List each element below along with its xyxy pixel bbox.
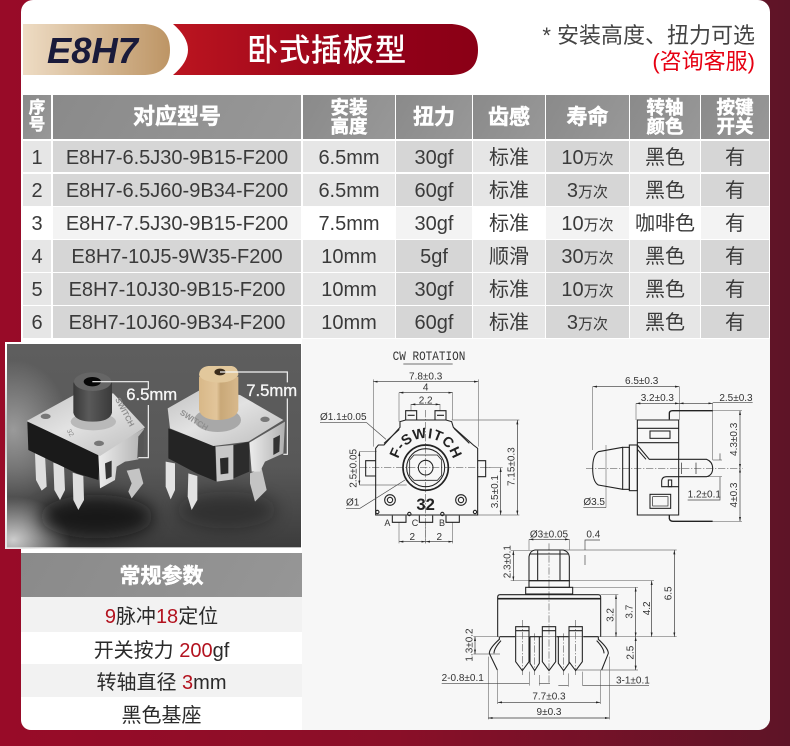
left switch: 6.5mm black shaft	[27, 372, 145, 510]
photo background	[0, 344, 301, 583]
row 2: 60gf	[415, 180, 453, 202]
product photo panel	[5, 342, 301, 549]
row 3: 标准	[489, 213, 529, 235]
drawing: bottom view: Ø3±0.05	[530, 529, 569, 540]
table header: 按键开关	[716, 97, 754, 137]
row 6: 3万次	[567, 312, 608, 334]
row 3	[31, 207, 769, 239]
drawing: bottom view	[442, 529, 677, 719]
table header: 寿命	[566, 106, 608, 128]
drawing: bottom view: 2.3±0.1	[503, 545, 514, 578]
row 1: 黑色	[645, 146, 685, 168]
parameters heading	[21, 553, 302, 597]
row 3: 咖啡色	[635, 213, 695, 235]
drawing: bottom view: 2.5	[625, 645, 636, 660]
drawing: side view: 4.3±0.3	[729, 422, 740, 456]
row 1: 有	[725, 146, 745, 168]
parameter: shaft diameter: 转轴直径 3mm	[96, 672, 226, 694]
drawing: bottom view: 4.2	[642, 601, 653, 615]
note: optional height and torque: * 安装高度、扭力可选	[542, 23, 755, 48]
drawing: side view: 4±0.3	[729, 482, 740, 507]
row 6: 标准	[489, 312, 529, 334]
drawing: front view: 3.5±0.1	[490, 475, 501, 508]
row 4: 顺滑	[489, 246, 529, 268]
row 4: E8H7-10J5-9W35-F200	[71, 246, 283, 268]
row 5: 30gf	[415, 279, 453, 301]
right switch: 7.5mm coffee shaft	[166, 366, 285, 510]
row 4: 10mm	[321, 246, 377, 268]
row 6	[23, 306, 769, 338]
row 5: 有	[725, 279, 745, 301]
row 6: E8H7-10J60-9B34-F200	[69, 312, 285, 334]
parameter: pulses and detents: 9脉冲18定位	[105, 606, 218, 628]
drawing: bottom view: 1.3±0.2	[465, 628, 476, 662]
callout: 6.5mm height: 6.5mm	[126, 385, 177, 404]
row 5: 5	[31, 279, 43, 301]
row 5: 10万次	[561, 279, 614, 301]
row 3: 有	[725, 213, 745, 235]
drawing: front view: 7.15±0.3	[506, 447, 517, 486]
row 2	[23, 174, 769, 206]
table header: 对应型号	[133, 104, 221, 129]
drawing: side view: 6.5±0.3	[625, 376, 659, 387]
drawing: front view: 2.5±0.05	[348, 448, 359, 488]
row 3: 3	[31, 213, 43, 235]
parameter: switch force: 开关按力 200gf	[94, 640, 229, 662]
drawing: bottom view: 3.2	[605, 608, 616, 622]
drawing: front view	[320, 350, 520, 544]
parameters heading: 常规参数	[120, 565, 204, 588]
row 2: 有	[725, 180, 745, 202]
drawing: bottom view: 6.5	[664, 586, 675, 600]
label: CW rotation: CW ROTATION	[393, 350, 465, 365]
table header: 扭力	[413, 106, 455, 128]
row 5	[23, 273, 769, 305]
row 6: 10mm	[321, 312, 377, 334]
parameter: switch force	[21, 632, 302, 664]
table header	[23, 95, 769, 139]
drawing: front view: Ø1	[346, 498, 360, 509]
row 5: 标准	[489, 279, 529, 301]
row 1: 10万次	[561, 146, 614, 168]
left switch: 6.5mm black shaft: SWITCH	[113, 396, 136, 428]
technical drawings	[320, 350, 753, 720]
row 6: 60gf	[415, 312, 453, 334]
row 6: 6	[31, 312, 43, 334]
drawing: side view: Ø3.5	[583, 497, 605, 508]
note: optional height and torque: (咨询客服)	[652, 49, 755, 74]
row 4: 30万次	[561, 246, 614, 268]
drawing: bottom view: 2-0.8±0.1	[442, 673, 484, 684]
drawing: side view	[583, 376, 753, 521]
drawing: front view: 4	[423, 382, 429, 393]
drawing: bottom view: 7.7±0.3	[532, 691, 566, 702]
row 2: 6.5mm	[318, 180, 380, 202]
row 2: 黑色	[645, 180, 685, 202]
table header: 齿感	[488, 106, 530, 128]
row 2: 3万次	[567, 180, 608, 202]
drawing: bottom view: 9±0.3	[537, 707, 562, 718]
drawing: side view: 2.5±0.3	[719, 393, 753, 404]
row 6: 黑色	[645, 312, 685, 334]
right switch: 7.5mm coffee shaft: SWITCH	[178, 408, 210, 433]
drawing: side view: 1.2±0.1	[688, 490, 721, 501]
row 2: E8H7-6.5J60-9B34-F200	[66, 180, 288, 202]
row 5: 10mm	[321, 279, 377, 301]
parameter: base colour: 黑色基座	[122, 705, 202, 727]
table header: 安装高度	[330, 97, 368, 137]
row 4	[23, 240, 769, 272]
photo frame	[5, 342, 302, 549]
row 6: 有	[725, 312, 745, 334]
parameter: base colour	[21, 697, 302, 730]
row 1: 标准	[489, 146, 529, 168]
title banner	[23, 24, 478, 75]
row 3: 30gf	[415, 213, 453, 235]
drawing: front view: 2.2	[419, 395, 433, 406]
row 1: 30gf	[415, 146, 453, 168]
drawing: front view: 2	[437, 532, 443, 543]
drawing: front view: Ø1.1±0.05	[320, 412, 367, 423]
drawing: front view: 32	[416, 495, 435, 514]
row 3: 7.5mm	[318, 213, 380, 235]
drawing: bottom view: 3.7	[625, 604, 636, 619]
row 2: 2	[31, 180, 43, 202]
light grey drawing area	[302, 339, 770, 730]
row 4: 有	[725, 246, 745, 268]
row 4: 5gf	[420, 246, 448, 268]
specification table	[23, 95, 769, 338]
drawing: front view: 2	[410, 532, 416, 543]
drawing: bottom view: 0.4	[586, 529, 601, 540]
row 3: E8H7-7.5J30-9B15-F200	[66, 213, 288, 235]
parameter: shaft diameter	[21, 664, 302, 697]
table header: 序号	[29, 99, 45, 134]
drawing: front view: A	[384, 518, 390, 528]
parameter: pulses and detents	[21, 597, 302, 632]
row 5: 黑色	[645, 279, 685, 301]
row 5: E8H7-10J30-9B15-F200	[69, 279, 285, 301]
note: optional height and torque	[542, 23, 755, 74]
row 1: 1	[31, 146, 43, 168]
row 3: 10万次	[561, 213, 614, 235]
row 4: 4	[31, 246, 43, 268]
row 4: 黑色	[645, 246, 685, 268]
drawing: bottom view: 3-1±0.1	[616, 675, 650, 686]
drawing: front view: F-SWITCH	[390, 428, 462, 458]
row 1: 6.5mm	[318, 146, 380, 168]
callout: 7.5mm height	[220, 372, 297, 454]
row 2: 标准	[489, 180, 529, 202]
callout: 7.5mm height: 7.5mm	[246, 381, 297, 400]
title banner: E8H7	[47, 30, 140, 71]
drawing: front view: C	[412, 518, 419, 528]
row 1	[23, 141, 769, 172]
callout: 6.5mm height	[92, 382, 177, 458]
drawing: front view: 7.8±0.3	[409, 371, 443, 382]
panel: regular parameters	[21, 553, 302, 730]
table header: 转轴颜色	[646, 97, 684, 137]
row 1: E8H7-6.5J30-9B15-F200	[66, 146, 288, 168]
title banner: 卧式插板型	[247, 25, 407, 70]
drawing: side view: 3.2±0.3	[641, 393, 674, 404]
left switch: 6.5mm black shaft: 32	[65, 428, 75, 438]
drawing: front view: B	[439, 518, 445, 528]
